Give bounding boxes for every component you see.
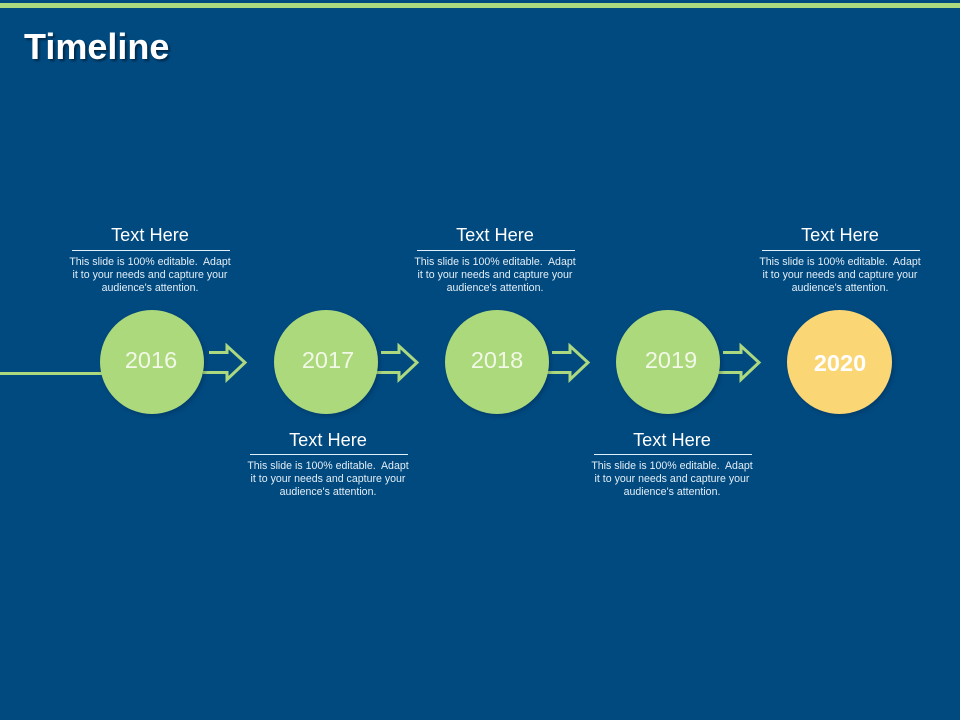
- milestone circle 2016: [100, 310, 204, 414]
- text block 2020: it to your needs and capture your: [763, 269, 917, 281]
- text block 2020: This slide is 100% editable. Adapt: [759, 256, 921, 268]
- text block 2016: [69, 225, 231, 294]
- arrow: 2019 to 2020: [717, 346, 759, 380]
- arrow: 2017 to 2018: [375, 346, 417, 380]
- text block 2017: it to your needs and capture your: [251, 473, 405, 485]
- year label 2019: 2019: [645, 347, 697, 373]
- text block 2020: audience's attention.: [792, 282, 888, 294]
- text block 2016: Text Here: [111, 225, 189, 245]
- text block 2017: This slide is 100% editable. Adapt: [247, 460, 409, 472]
- text block 2016: it to your needs and capture your: [73, 269, 227, 281]
- top accent bar: [0, 3, 960, 8]
- milestone circle 2020: [787, 310, 892, 414]
- text block 2019: [591, 430, 753, 498]
- milestone circle 2017: [274, 310, 378, 414]
- text block 2017: [247, 430, 409, 498]
- text block 2019: This slide is 100% editable. Adapt: [591, 460, 753, 472]
- year label 2018: 2018: [471, 347, 523, 373]
- text block 2020: Text Here: [801, 225, 879, 245]
- text block 2018: audience's attention.: [447, 282, 543, 294]
- text block 2018: it to your needs and capture your: [418, 269, 572, 281]
- year label 2016: 2016: [125, 347, 177, 373]
- milestone circle 2018: [445, 310, 549, 414]
- text block 2018: This slide is 100% editable. Adapt: [414, 256, 576, 268]
- year label 2020: 2020: [814, 350, 866, 376]
- text block 2018: [414, 225, 576, 294]
- title: Timeline: [24, 26, 169, 67]
- text block 2019: audience's attention.: [624, 486, 720, 498]
- text block 2016: audience's attention.: [102, 282, 198, 294]
- text block 2017: audience's attention.: [280, 486, 376, 498]
- text block 2019: it to your needs and capture your: [595, 473, 749, 485]
- text block 2020: [759, 225, 921, 294]
- text block 2019: Text Here: [633, 430, 711, 450]
- arrow: 2016 to 2017: [203, 346, 245, 380]
- text block 2016: This slide is 100% editable. Adapt: [69, 256, 231, 268]
- milestone circle 2019: [616, 310, 720, 414]
- text block 2017: Text Here: [289, 430, 367, 450]
- arrow: 2018 to 2019: [546, 346, 588, 380]
- lead-in line: [0, 372, 102, 375]
- year label 2017: 2017: [302, 347, 354, 373]
- text block 2018: Text Here: [456, 225, 534, 245]
